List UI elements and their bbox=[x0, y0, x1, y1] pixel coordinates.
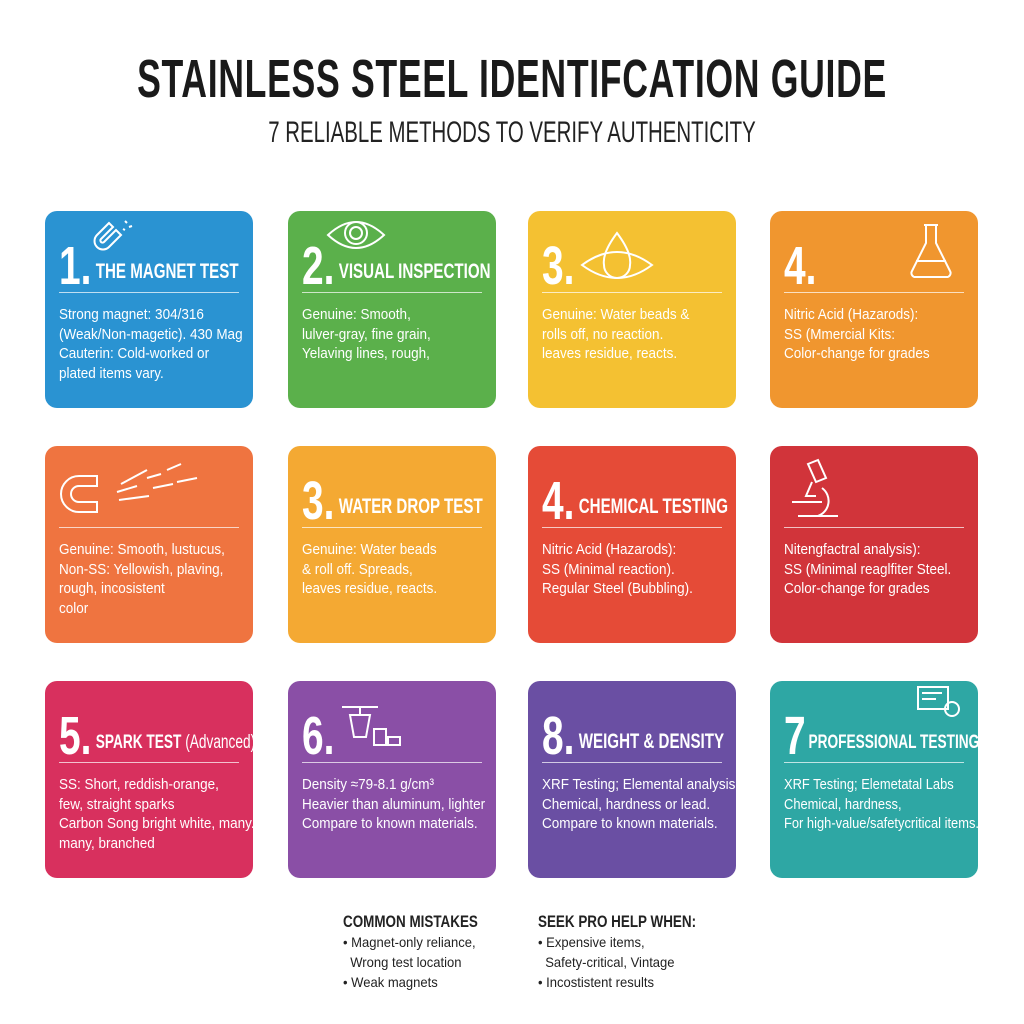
panel: chemical testing bbox=[528, 446, 736, 643]
body text: Chemical, hardness or lead. bbox=[542, 796, 710, 812]
panel: visual inspection bbox=[288, 211, 496, 408]
body text: Nitric Acid (Hazarods): bbox=[542, 541, 676, 558]
body text: & roll off. Spreads, bbox=[302, 560, 413, 578]
panel: density bbox=[288, 681, 496, 878]
heading: CHEMICAL TESTING bbox=[579, 495, 728, 518]
heading bbox=[302, 471, 483, 531]
subtitle: 7 RELIABLE METHODS TO VERIFY AUTHENTICITY bbox=[268, 116, 756, 149]
body text: Color-change for grades bbox=[784, 580, 930, 597]
body text bbox=[784, 541, 951, 597]
heading: 7 bbox=[784, 706, 806, 766]
body text bbox=[784, 306, 930, 362]
body text: color bbox=[59, 600, 88, 616]
body text: Regular Steel (Bubbling). bbox=[542, 580, 693, 597]
body text: For high-value/safetycritical items. bbox=[784, 815, 978, 832]
body text: Compare to known materials. bbox=[542, 815, 718, 832]
heading: PROFESSIONAL TESTING bbox=[809, 732, 978, 753]
body text: rolls off, no reaction. bbox=[542, 326, 663, 342]
heading: 2. bbox=[302, 236, 334, 296]
heading: 3. bbox=[302, 471, 334, 531]
panel: magnet test bbox=[45, 211, 253, 408]
text block: seek pro help: SEEK PRO HELP WHEN: bbox=[538, 912, 696, 931]
text block: seek pro help bbox=[538, 912, 696, 990]
icon: certificate bbox=[917, 686, 960, 717]
icon: magnet sparks bbox=[60, 463, 198, 513]
body text bbox=[302, 306, 431, 362]
panel: microscope bbox=[770, 446, 978, 643]
body text: Genuine: Smooth, bbox=[302, 306, 411, 323]
text block: common mistakes: COMMON MISTAKES bbox=[343, 912, 478, 931]
body text bbox=[302, 541, 437, 597]
body text: SS (Minimal reaction). bbox=[542, 560, 675, 578]
body text: Non-SS: Yellowish, plaving, bbox=[59, 560, 223, 578]
heading bbox=[59, 236, 239, 296]
heading bbox=[302, 236, 491, 296]
body text: Cauterin: Cold-worked or bbox=[59, 345, 209, 362]
body text: SS (Mmercial Kits: bbox=[784, 326, 895, 342]
heading: 5. bbox=[59, 706, 91, 766]
icon: eye bbox=[326, 221, 386, 249]
icon: drop eye bbox=[580, 232, 654, 279]
heading bbox=[59, 706, 253, 766]
body text: Density ≈79-8.1 g/cm³ bbox=[302, 776, 434, 793]
body text bbox=[542, 541, 693, 597]
heading bbox=[784, 706, 978, 766]
heading: VISUAL INSPECTION bbox=[339, 260, 491, 283]
body text: XRF Testing; Elemental analysis. bbox=[542, 776, 736, 793]
body text: (Weak/Non-magetic). 430 Mag bbox=[59, 326, 243, 342]
panel: professional testing bbox=[770, 681, 978, 878]
body text: Chemical, hardness, bbox=[784, 796, 902, 812]
panel: spark magnet bbox=[45, 446, 253, 643]
icon: magnet bbox=[94, 220, 132, 250]
icon: scale bbox=[342, 706, 401, 746]
body text: SS (Minimal reaglfiter Steel. bbox=[784, 560, 951, 578]
heading: WATER DROP TEST bbox=[339, 495, 483, 518]
body text: Genuine: Water beads & bbox=[542, 306, 689, 323]
body text: Genuine: Smooth, lustucus, bbox=[59, 541, 225, 558]
body text bbox=[542, 306, 690, 362]
heading: 6. bbox=[302, 706, 334, 766]
body text: few, straight sparks bbox=[59, 796, 175, 812]
heading: 3. bbox=[542, 236, 574, 296]
body text bbox=[542, 776, 736, 832]
panel: water drop 1 bbox=[528, 211, 736, 408]
body text: Strong magnet: 304/316 bbox=[59, 306, 204, 323]
body text: rough, incosistent bbox=[59, 580, 165, 597]
text block: seek pro help: • Expensive items, bbox=[538, 934, 645, 950]
heading: WEIGHT & DENSITY bbox=[579, 730, 724, 753]
body text bbox=[302, 776, 485, 832]
body text: Compare to known materials. bbox=[302, 815, 478, 832]
body text: many, branched bbox=[59, 834, 155, 852]
text block: common mistakes: • Magnet-only reliance, bbox=[343, 934, 476, 950]
body text: plated items vary. bbox=[59, 364, 164, 382]
panel: weight density bbox=[528, 681, 736, 878]
body text: lulver-gray, fine grain, bbox=[302, 326, 431, 342]
title: STAINLESS STEEL IDENTIFCATION GUIDE bbox=[137, 49, 887, 109]
body text: leaves residue, reacts. bbox=[542, 345, 677, 362]
body text: Yelaving lines, rough, bbox=[302, 345, 430, 362]
panel: water drop test bbox=[288, 446, 496, 643]
body text bbox=[784, 776, 978, 832]
body text: Genuine: Water beads bbox=[302, 541, 437, 558]
body text: XRF Testing; Elemetatal Labs bbox=[784, 776, 954, 793]
text block: common mistakes bbox=[343, 912, 478, 990]
panel: chemical 1 bbox=[770, 211, 978, 408]
body text bbox=[59, 776, 253, 852]
body text: Nitengfactral analysis): bbox=[784, 541, 921, 558]
body text: Color-change for grades bbox=[784, 345, 930, 362]
heading: 4. bbox=[542, 471, 574, 531]
text block: seek pro help: • Incostistent results bbox=[538, 974, 654, 990]
icon: flask bbox=[910, 224, 952, 278]
body text bbox=[59, 306, 243, 382]
text block: seek pro help: Safety-critical, Vintage bbox=[545, 954, 675, 970]
heading: 1. bbox=[59, 236, 91, 296]
body text: leaves residue, reacts. bbox=[302, 580, 437, 597]
heading: SPARK TEST (Advanced) bbox=[96, 732, 253, 753]
body text: SS: Short, reddish-orange, bbox=[59, 776, 219, 793]
body text: Heavier than aluminum, lighter bbox=[302, 796, 485, 812]
icon: microscope bbox=[792, 458, 838, 517]
body text: Nitric Acid (Hazarods): bbox=[784, 306, 918, 323]
text block: common mistakes: • Weak magnets bbox=[343, 974, 438, 990]
heading: 8. bbox=[542, 706, 574, 766]
body text: Carbon Song bright white, many. bbox=[59, 815, 253, 832]
body text bbox=[59, 541, 225, 616]
heading bbox=[542, 471, 728, 531]
heading bbox=[542, 706, 724, 766]
panel: spark test bbox=[45, 681, 253, 878]
heading: THE MAGNET TEST bbox=[96, 260, 239, 283]
text block: common mistakes: Wrong test location bbox=[350, 954, 461, 970]
heading: 4. bbox=[784, 236, 816, 296]
